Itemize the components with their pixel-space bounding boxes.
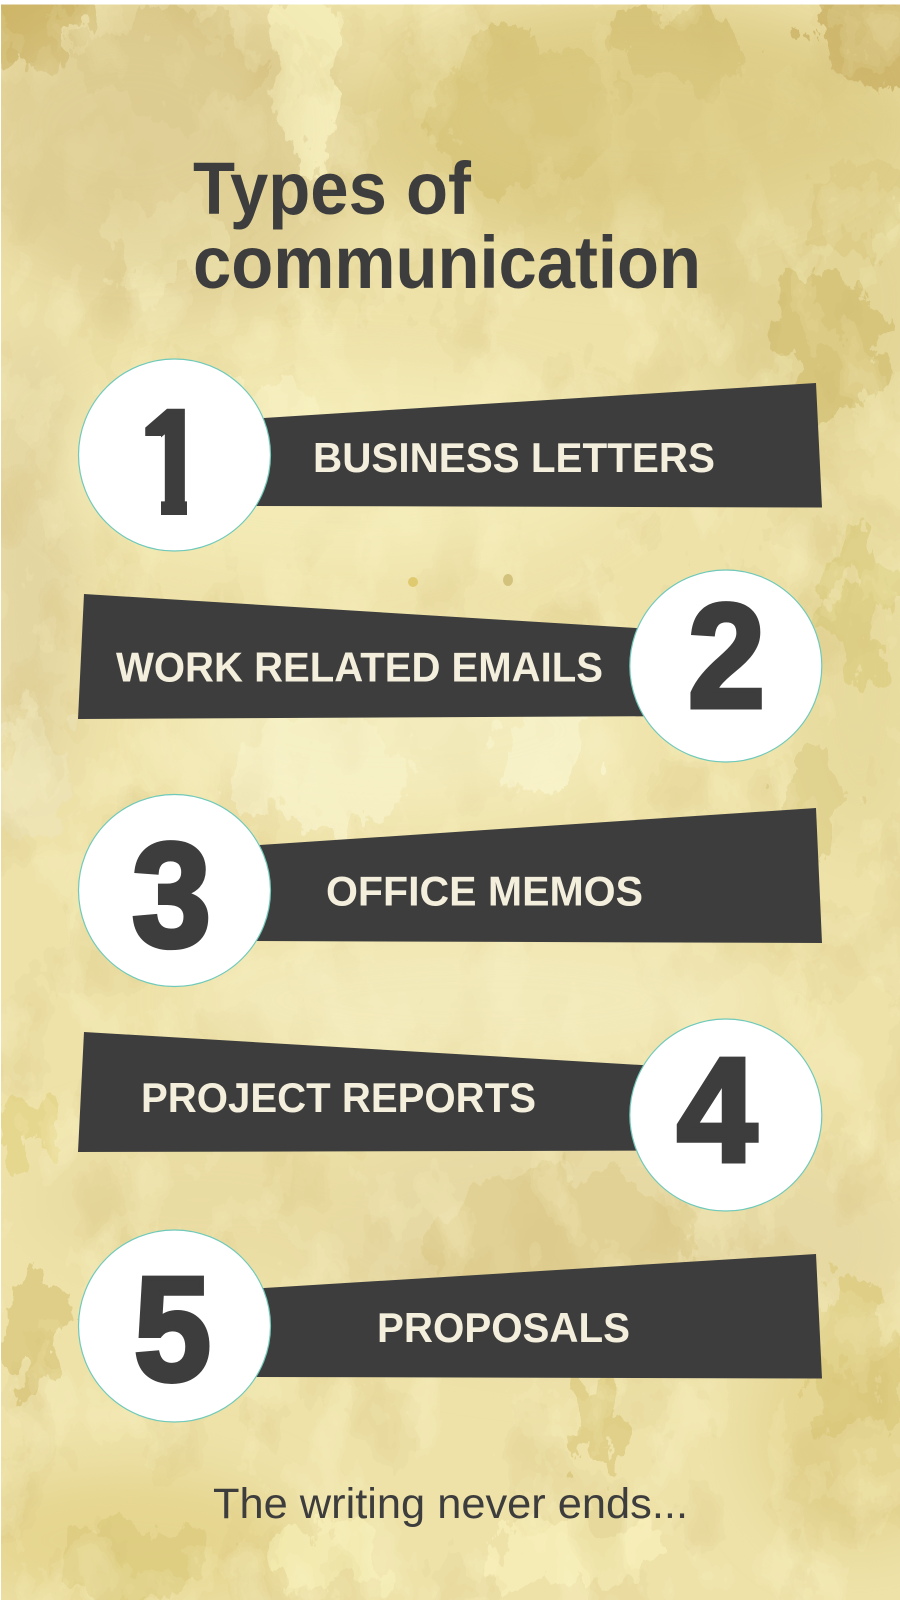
circle badge 3	[78, 794, 270, 986]
banner 5	[200, 1254, 822, 1378]
item 1: business letters	[78, 359, 822, 554]
title: Types of	[193, 147, 471, 230]
banner 3	[200, 808, 822, 943]
circle badge 1	[78, 359, 270, 551]
number 1: 1	[139, 378, 205, 554]
number 2: 2	[688, 574, 765, 739]
number 3: 3	[132, 813, 211, 978]
item 3: office memos	[78, 794, 822, 986]
item 2: work related emails	[78, 570, 822, 762]
item 4: project reports	[78, 1019, 822, 1211]
label 1: BUSINESS LETTERS	[313, 434, 715, 481]
circle badge 5	[78, 1230, 270, 1422]
title: communication	[193, 221, 701, 304]
label 3: OFFICE MEMOS	[326, 868, 643, 914]
circle badge 2	[630, 570, 822, 762]
title	[193, 147, 701, 304]
number 4: 4	[677, 1028, 757, 1193]
label 2: WORK RELATED EMAILS	[116, 644, 603, 690]
number 5: 5	[134, 1247, 211, 1412]
item 5: proposals	[78, 1230, 822, 1422]
circle badge 4	[630, 1019, 822, 1211]
tagline: The writing never ends...	[213, 1480, 688, 1528]
banner 4	[78, 1032, 700, 1152]
label 5: PROPOSALS	[377, 1304, 630, 1351]
banner 1	[200, 383, 822, 508]
label 4: PROJECT REPORTS	[141, 1074, 536, 1121]
banner 2	[78, 594, 700, 719]
